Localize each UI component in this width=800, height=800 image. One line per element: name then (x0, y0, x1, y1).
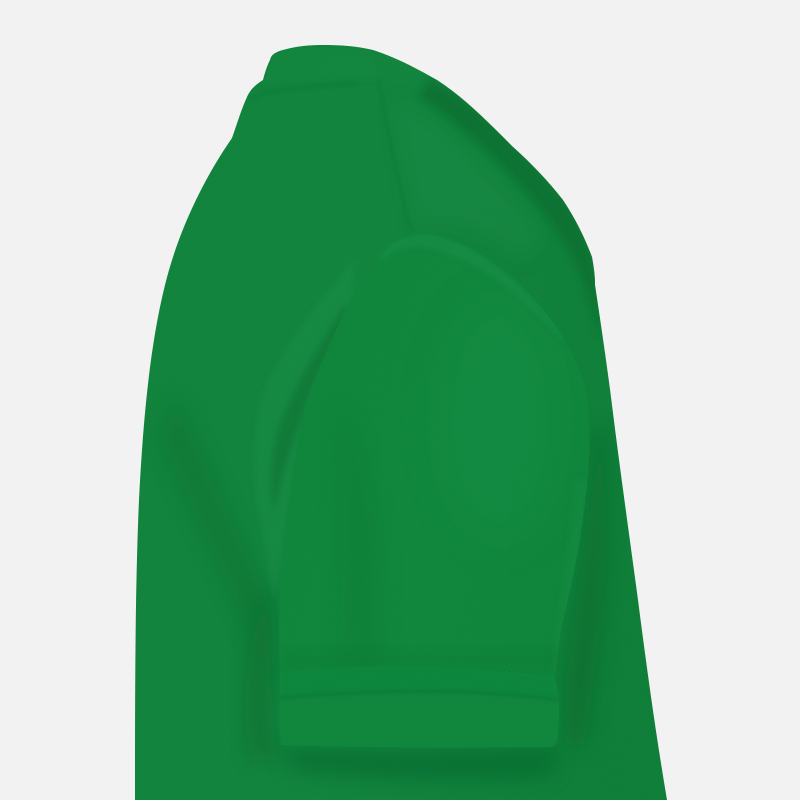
sleeve highlight (440, 300, 560, 540)
left diagonal crease (172, 429, 254, 608)
sleeve shape (270, 225, 600, 755)
armhole light fold (254, 258, 355, 600)
dark band beside sleeve (248, 652, 272, 754)
sleeve right light edge (552, 480, 588, 670)
sleeve top lighter cap edge (389, 238, 498, 274)
hem upper shade (280, 650, 556, 668)
armhole dark crease (272, 309, 346, 496)
light panel below neckline (395, 100, 545, 260)
shadow right of sleeve (566, 452, 606, 738)
hem lower band (280, 692, 559, 750)
shadow under sleeve hem (282, 746, 558, 778)
illustration: green t-shirt side view (135, 45, 667, 800)
hem fold band (341, 668, 342, 669)
sleeve left shading (339, 400, 383, 670)
placket dark edge along neckline (420, 78, 600, 340)
shoulder seam (378, 80, 411, 230)
collar fold line (247, 47, 380, 100)
shirt body (120, 30, 680, 800)
sleeve (270, 225, 600, 755)
hem mesh (280, 660, 560, 750)
hem stitch line (280, 692, 559, 700)
